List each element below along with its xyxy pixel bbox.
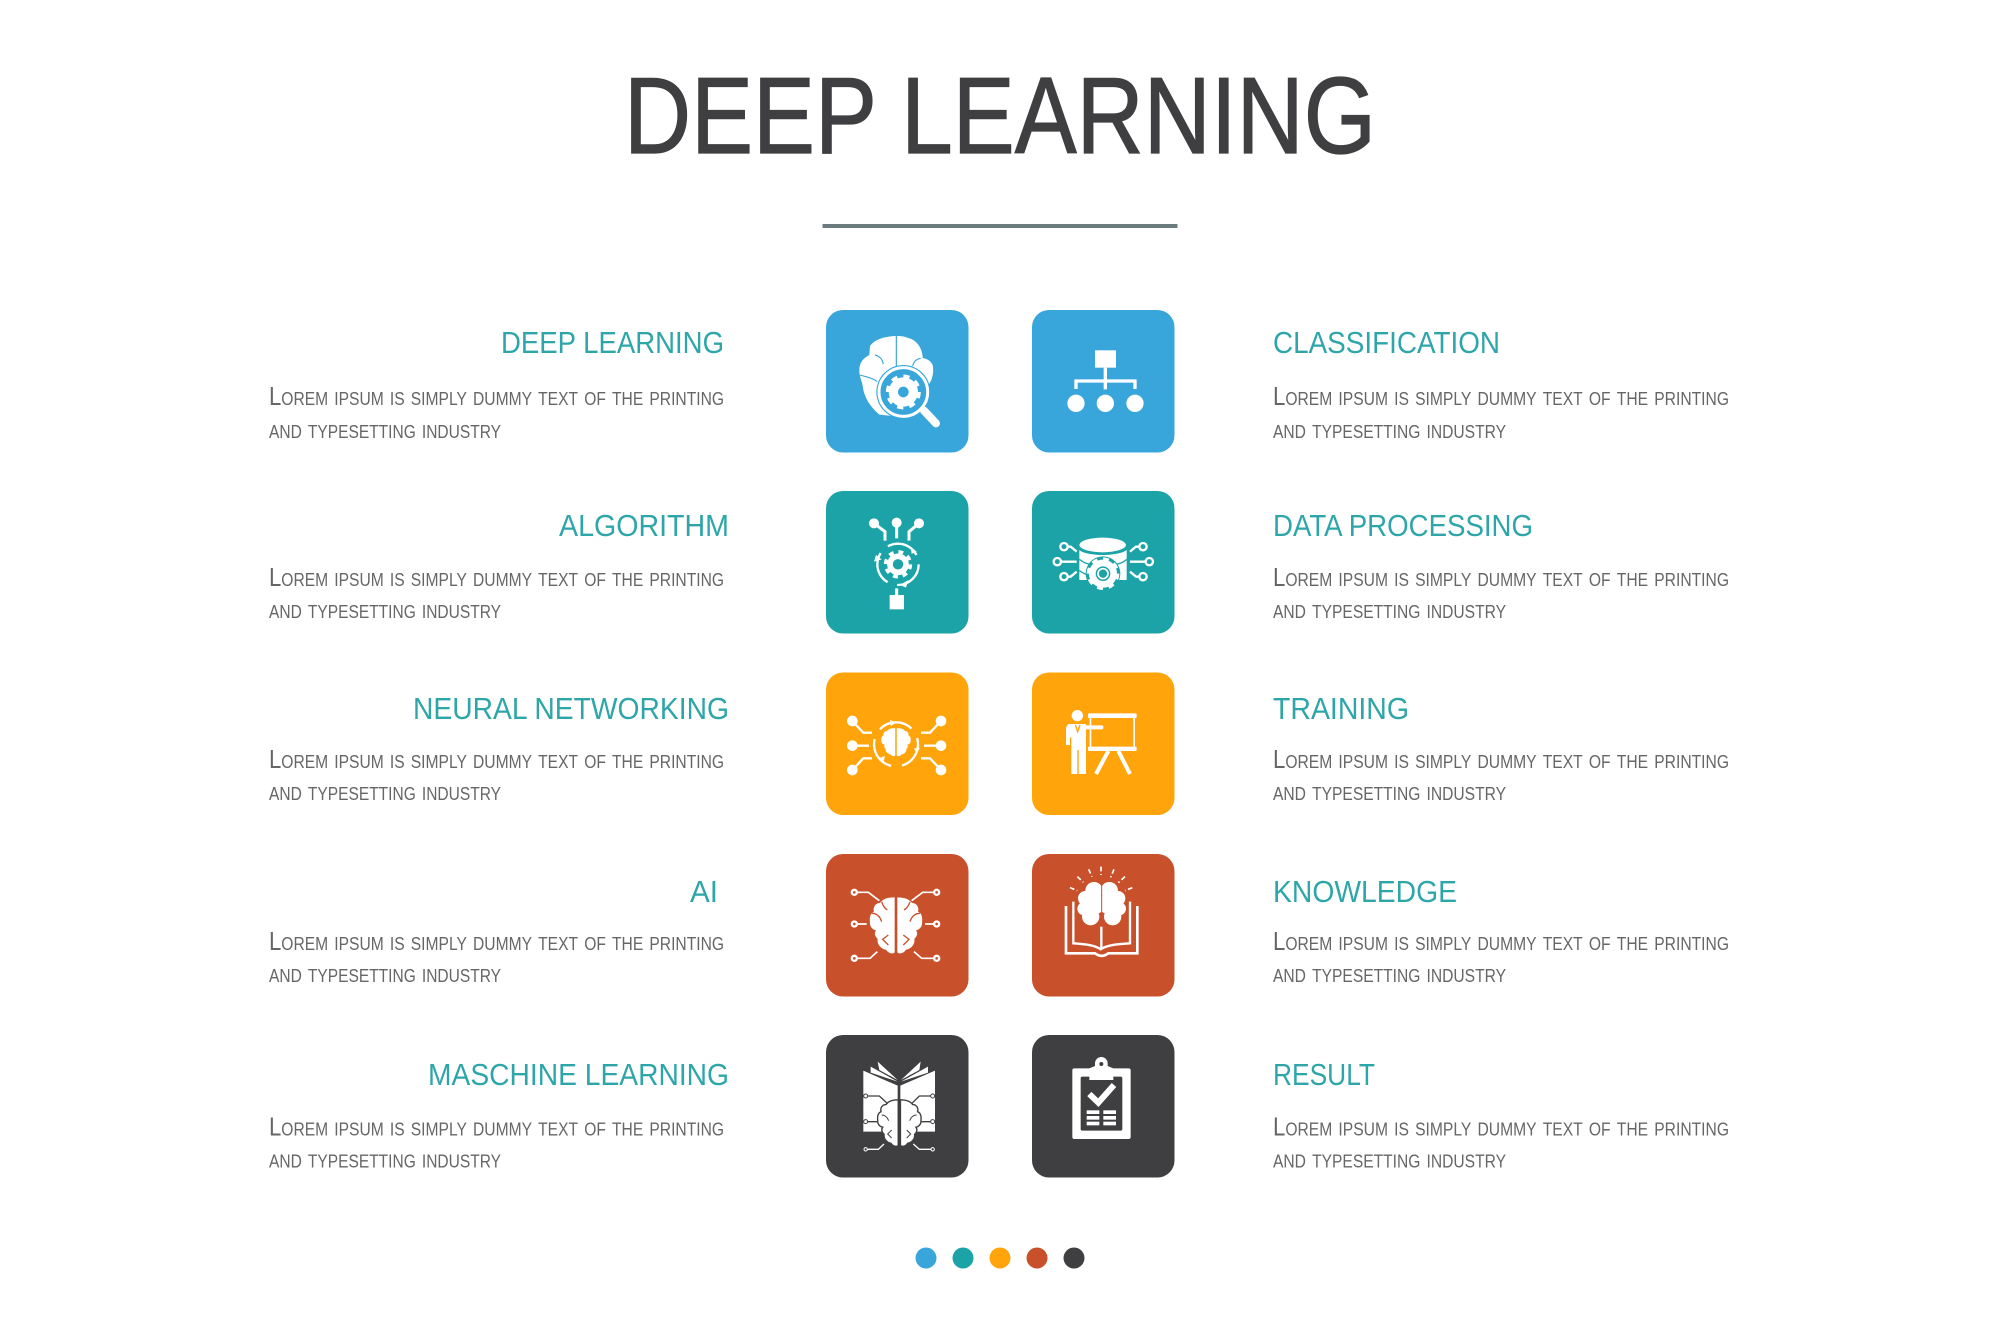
heading: AI [690, 874, 718, 909]
body text: Lorem ipsum is simply dummy text of the printing [1273, 928, 1729, 956]
heading: NEURAL NETWORKING [413, 691, 729, 726]
panel: neural networking tile [826, 672, 968, 815]
icon: presenter at board [1066, 710, 1137, 774]
text block: algorithm [269, 508, 729, 624]
body text: and typesetting industry [1273, 778, 1506, 806]
body text: and typesetting industry [1273, 596, 1506, 624]
heading: ALGORITHM [559, 508, 729, 543]
icon: book with circuit brain [863, 1062, 935, 1151]
body text: Lorem ipsum is simply dummy text of the printing [269, 564, 724, 592]
heading: TRAINING [1273, 691, 1409, 726]
pagination dots [916, 1248, 1084, 1268]
text block: data processing [1273, 508, 1729, 624]
text block: classification [1273, 325, 1729, 444]
icon: gear with inputs and output [869, 518, 924, 609]
body text: and typesetting industry [1273, 960, 1506, 988]
heading: RESULT [1273, 1057, 1375, 1092]
icon: database gear [1054, 538, 1153, 591]
panel: deep learning tile [826, 310, 968, 452]
text block: neural networking [269, 691, 729, 806]
body text: Lorem ipsum is simply dummy text of the printing [1273, 564, 1729, 592]
text block: ai [269, 874, 724, 988]
body text: and typesetting industry [269, 596, 501, 624]
body text: Lorem ipsum is simply dummy text of the printing [1273, 1114, 1729, 1142]
panel: training tile [1032, 672, 1174, 815]
icon: hierarchy [1067, 350, 1144, 412]
panel: data processing tile [1032, 491, 1174, 634]
panel: machine learning tile [826, 1035, 968, 1178]
body text: and typesetting industry [1273, 416, 1506, 444]
body text: and typesetting industry [269, 960, 501, 988]
panel: result tile [1032, 1035, 1174, 1178]
body text: Lorem ipsum is simply dummy text of the printing [269, 1114, 724, 1142]
text block: knowledge [1273, 874, 1729, 988]
title: DEEP LEARNING [624, 55, 1376, 177]
panel: classification tile [1032, 310, 1174, 452]
heading: DEEP LEARNING [501, 325, 724, 360]
body text: and typesetting industry [269, 416, 501, 444]
text block: deep learning [269, 325, 724, 444]
body text: Lorem ipsum is simply dummy text of the printing [269, 928, 724, 956]
icon: circuit brain [851, 889, 940, 962]
body text: and typesetting industry [1273, 1146, 1506, 1174]
body text: Lorem ipsum is simply dummy text of the printing [269, 746, 724, 774]
text block: maschine learning [269, 1057, 729, 1174]
panel: knowledge tile [1032, 854, 1174, 996]
title divider [822, 224, 1178, 228]
heading: MASCHINE LEARNING [428, 1057, 729, 1092]
body text: and typesetting industry [269, 1146, 501, 1174]
icon: brain with magnifier [859, 335, 936, 423]
body text: Lorem ipsum is simply dummy text of the printing [1273, 746, 1729, 774]
heading: DATA PROCESSING [1273, 508, 1533, 543]
icon: brain network [847, 716, 946, 775]
text block: training [1273, 691, 1729, 806]
body text: Lorem ipsum is simply dummy text of the printing [269, 383, 724, 411]
body text: Lorem ipsum is simply dummy text of the printing [1273, 383, 1729, 411]
text block: result [1273, 1057, 1729, 1174]
panel: algorithm tile [826, 491, 968, 634]
icon: clipboard checklist [1072, 1057, 1131, 1139]
heading: CLASSIFICATION [1273, 325, 1500, 360]
icon: brain over open book [1066, 867, 1137, 956]
panel: ai tile [826, 854, 968, 996]
heading: KNOWLEDGE [1273, 874, 1457, 909]
body text: and typesetting industry [269, 778, 501, 806]
